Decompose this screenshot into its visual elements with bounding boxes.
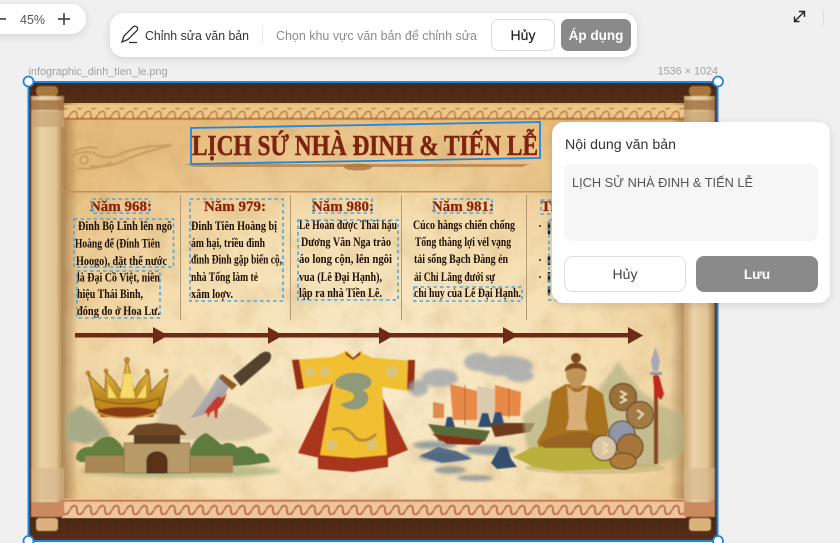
column: year 979 xyxy=(191,199,282,301)
year 968 body text: là Đại Cồ Việt, niên xyxy=(77,270,160,284)
year 981 body text: chỉ huy của Lê Đại Hạnh. xyxy=(414,286,521,300)
file name: infographic_dinh_tien_le.png xyxy=(28,66,168,78)
year 980 body text: lập ra nhà Tiền Lê. xyxy=(299,286,382,300)
illustration: ships and water xyxy=(413,384,535,481)
panel: text content editor xyxy=(552,122,830,303)
illustration: mountain behind buddha xyxy=(522,362,684,467)
zoom control xyxy=(0,4,86,34)
year 980 body text xyxy=(299,218,397,300)
bottom ornament border xyxy=(62,499,686,518)
column: year 968 xyxy=(75,199,172,318)
toolbar hint: Chọn khu vực văn bản để chỉnh sửa xyxy=(276,28,478,43)
right roller xyxy=(684,86,715,531)
scroll title: LỊCH SỨ NHÀ ĐINH & TIẾN LỄ xyxy=(192,128,538,162)
year 981 body text: Cúco hàngs chiến chống xyxy=(413,218,516,232)
illustration: buddha xyxy=(513,353,665,474)
left roller xyxy=(31,86,64,531)
scroll image xyxy=(28,82,718,541)
icon: pen xyxy=(122,26,138,42)
top wood band xyxy=(30,83,716,105)
year 980 body text: vua (Lê Đại Hạnh), xyxy=(299,270,382,284)
year 981 body text: Tống thàng lợi vẻl vạng xyxy=(415,235,512,249)
edit toolbar xyxy=(110,13,637,57)
year 980 body text: Lê Hoàn được Thái hậu xyxy=(299,218,397,232)
image selection frame xyxy=(24,76,723,543)
timeline arrows xyxy=(75,327,643,344)
top ornament border xyxy=(62,105,686,120)
year 968 body text: Đinh Bộ Lĩnh lên ngô xyxy=(78,219,172,233)
year 968 body text: hiệu Thái Bình, xyxy=(77,287,143,301)
column: partially hidden fifth column: Ti xyxy=(541,199,555,215)
illustration: bloody dagger xyxy=(190,352,271,418)
column: year 980 xyxy=(299,199,397,300)
illustration: citadel xyxy=(76,423,280,478)
title underline ornament xyxy=(185,164,530,170)
illustration: coins xyxy=(592,384,654,469)
year 981 body text: tải sống Bạch Đàng ẻn xyxy=(414,252,508,266)
panel heading: Nội dung văn bản xyxy=(565,137,676,152)
column: partially hidden fifth column xyxy=(539,199,555,295)
year 981 body text: ải Chỉ Lăng đưới sự xyxy=(414,270,495,284)
column: year 981 xyxy=(413,199,521,300)
button: save xyxy=(696,256,818,292)
column: year 968: Năm 968: xyxy=(90,199,152,215)
column: year 980: Năm 980: xyxy=(312,199,374,215)
zoom control: 45% xyxy=(20,13,45,27)
year 979 body text: ám hại, triều đình xyxy=(191,236,265,250)
button: cancel xyxy=(492,20,554,50)
year 968 body text: Hoàng đế (Đính Tiên xyxy=(75,236,160,250)
year 980 body text: Dương Vân Nga trào xyxy=(301,235,391,249)
button: apply: Áp dụng xyxy=(569,28,623,43)
bottom wood band xyxy=(30,517,716,540)
year 979 body text: xâm loợv. xyxy=(191,287,233,301)
column: year 981: Năm 981: xyxy=(432,199,494,215)
year 968 body text xyxy=(75,219,172,318)
text area: LỊCH SỬ NHÀ ĐINH & TIẾN LỄ xyxy=(572,175,753,190)
title ornament left xyxy=(68,145,172,169)
year 979 body text: Đinh Tiên Hoàng bị xyxy=(191,219,277,233)
illustration: spear xyxy=(650,347,664,464)
year 979 body text xyxy=(191,219,282,301)
toolbar label: Chỉnh sửa văn bản xyxy=(145,28,249,43)
image dimensions: 1536 × 1024 xyxy=(658,66,718,78)
button: cancel: Hủy xyxy=(511,27,535,43)
year 980 body text: áo long cộn, lên ngôi xyxy=(299,252,392,266)
parchment xyxy=(62,103,686,518)
column dividers xyxy=(180,195,526,320)
illustration: crown xyxy=(86,358,168,418)
button: save: Lưu xyxy=(744,267,770,282)
year 968 body text: Hoogo), đặt thể nước xyxy=(76,254,167,268)
button: cancel: Hủy xyxy=(613,266,637,282)
button: apply xyxy=(561,19,631,51)
year 979 body text: đình Đinh gặp biến cộ, xyxy=(191,252,282,266)
year 979 body text: nhà Tống làm tẻ xyxy=(191,270,258,284)
icon: expand xyxy=(794,12,804,22)
year 968 body text: đóng đo ở Hoa Lư. xyxy=(77,304,160,318)
year 981 body text xyxy=(413,218,521,300)
illustration: mountains behind citadel xyxy=(66,373,273,444)
detected text dashed boxes xyxy=(74,199,559,318)
column: year 979: Năm 979: xyxy=(204,199,266,215)
selected title box xyxy=(191,122,540,164)
text area xyxy=(564,164,818,241)
button: cancel xyxy=(564,256,686,292)
illustration: clouds xyxy=(408,353,534,396)
illustration: imperial robe xyxy=(292,351,415,472)
